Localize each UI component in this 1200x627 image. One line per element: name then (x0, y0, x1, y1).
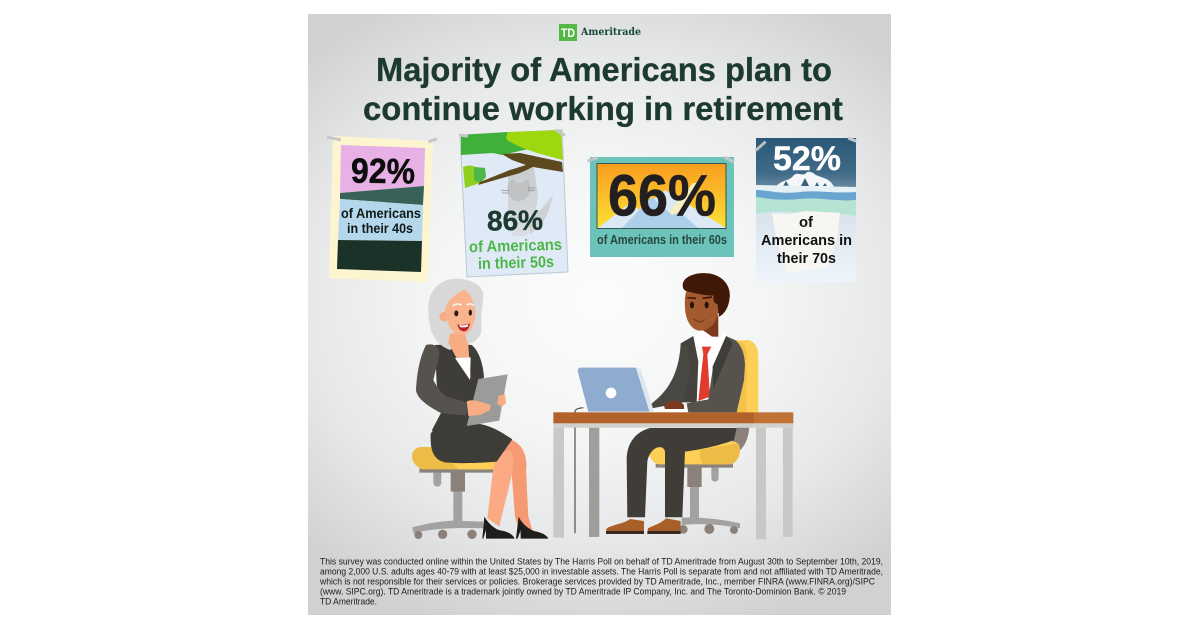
laptop (578, 368, 687, 412)
poster: 66% in their 60s (587, 156, 735, 257)
poster: 52% in their 70s: their 70s (777, 250, 836, 267)
torso (651, 315, 745, 412)
title: Majority of Americans plan to (376, 51, 832, 88)
head (683, 273, 730, 331)
poster: 52% in their 70s (755, 137, 857, 282)
footnote: TD Ameritrade. (320, 596, 377, 606)
trousers (627, 428, 737, 517)
title (363, 51, 843, 127)
tablet (467, 374, 508, 426)
footnote: This survey was conducted online within the United States by The Harris Poll on behalf of TD Ameritrade from August 30th to September 10th, 2019, (320, 556, 883, 566)
poster: 86% in their 50s: of Americans (469, 237, 562, 256)
poster: 66% in their 60s: 66% (608, 164, 716, 228)
neck and blouse (448, 333, 471, 380)
poster: 86% in their 50s: 86% (487, 205, 543, 236)
poster: 92% in their 40s: in their 40s (347, 220, 413, 236)
footnote: among 2,000 U.S. adults ages 40-79 with at least $25,000 in investable assets. The Harris Poll is separate from and not affiliated with TD Ameritrade, (320, 566, 883, 576)
poster: 66% in their 60s: of Americans in their 60s (597, 232, 727, 247)
desk (553, 412, 793, 539)
chair: woman (412, 447, 497, 539)
cable (575, 408, 583, 533)
poster: 52% in their 70s: 52% (773, 140, 841, 178)
background panel (308, 14, 891, 615)
footnote: (www. SIPC.org). TD Ameritrade is a trademark jointly owned by TD Ameritrade IP Company, Inc. and The Toronto-Dominion Bank. © 2019 (320, 586, 846, 596)
legs and shoes: woman (482, 440, 548, 539)
poster: 92% in their 40s: of Americans (341, 205, 421, 221)
hands (467, 394, 506, 416)
poster: 92% in their 40s: 92% (351, 151, 415, 192)
logo: TD Ameritrade: Ameritrade (580, 27, 641, 38)
skirt (431, 424, 512, 463)
illustration: woman on chair (412, 279, 548, 539)
footnote: which is not responsible for their services or policies. Brokerage services provided by TD Ameritrade, Inc., member FINRA (www.FINRA.org)/SIPC (319, 576, 875, 586)
poster: 52% in their 70s: Americans in (761, 232, 852, 249)
logo: TD Ameritrade: TD (561, 26, 575, 40)
poster: 86% in their 50s: in their 50s (478, 254, 554, 273)
footnote (319, 556, 883, 606)
poster: 86% in their 50s (459, 129, 568, 277)
face (439, 287, 482, 335)
sleeve (416, 344, 467, 416)
logo: TD Ameritrade (559, 24, 641, 41)
office chair back and seat (648, 340, 758, 534)
shoes (606, 518, 681, 534)
poster: 92% in their 40s (327, 136, 437, 282)
title: continue working in retirement (363, 90, 843, 127)
cat (501, 168, 553, 236)
poster: 52% in their 70s: of (799, 214, 814, 231)
illustration: man at desk (553, 273, 793, 539)
hair (428, 279, 483, 350)
jacket (432, 344, 484, 433)
